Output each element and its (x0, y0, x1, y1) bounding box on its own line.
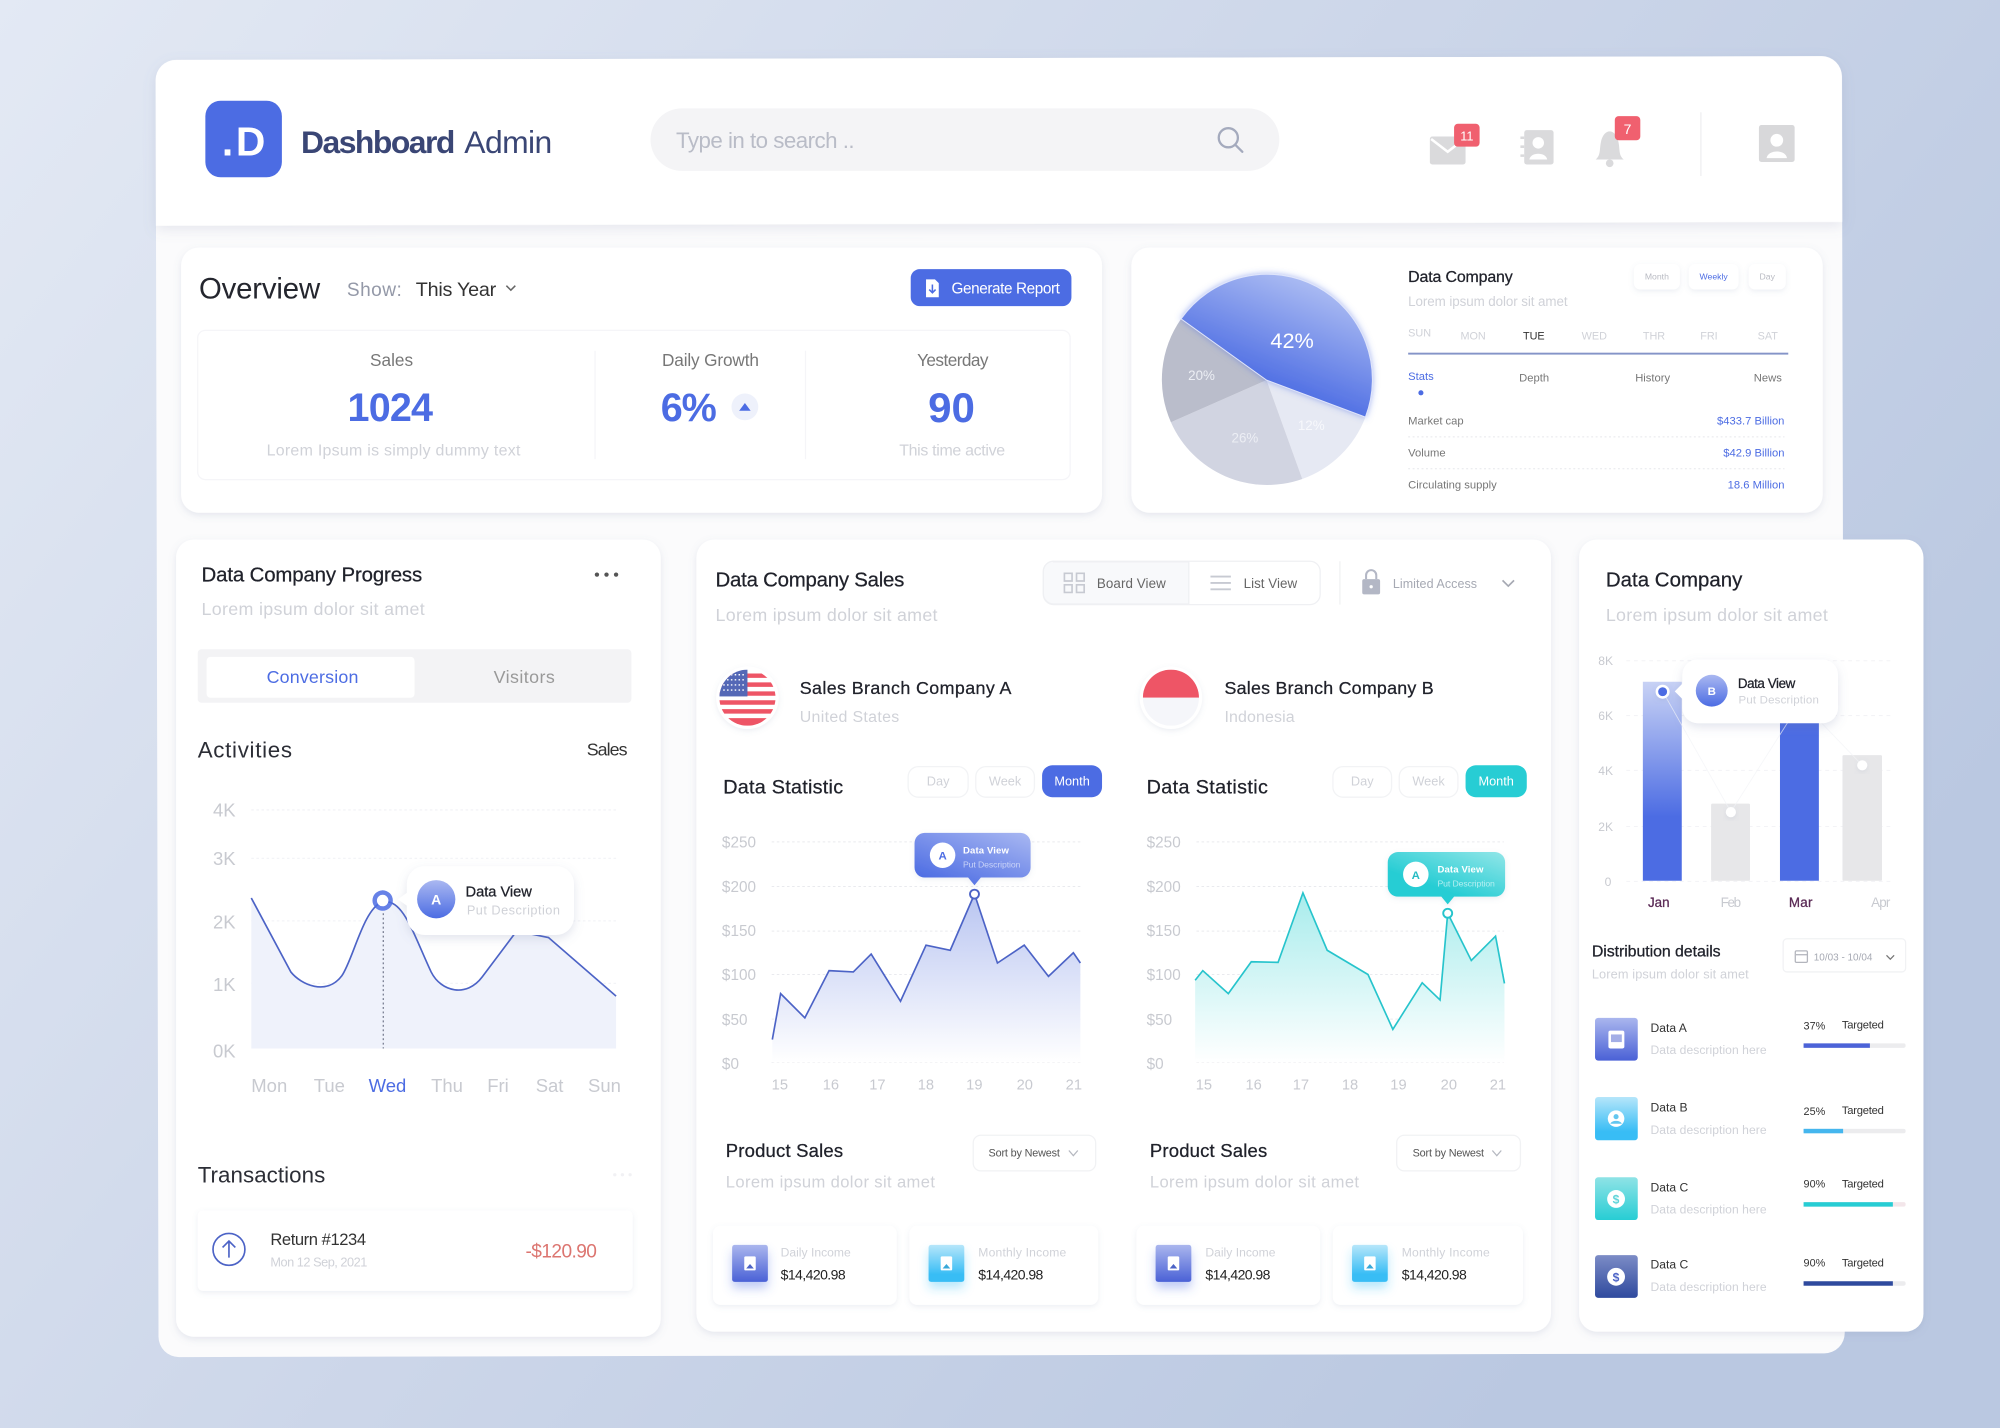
month labels: Mar (1789, 895, 1813, 910)
area chart A (722, 833, 1082, 1093)
tabs (198, 649, 631, 703)
view toggle (1043, 561, 1320, 605)
statistic B heading and buttons: Day (1351, 774, 1374, 789)
row: data C second: $ (1613, 1270, 1620, 1284)
tooltip A: Data View (963, 845, 1009, 856)
statistic A heading and buttons: Data Statistic (723, 776, 843, 798)
transaction row: Mon 12 Sep, 2021 (270, 1255, 367, 1270)
market rows: 18.6 Million (1728, 480, 1784, 492)
panel: data company bars and distribution (1579, 540, 1923, 1332)
distribution heading: Distribution details (1592, 944, 1721, 961)
tabs: Conversion (267, 667, 358, 687)
overview heading: Overview (199, 272, 321, 305)
row: data A: Targeted (1842, 1020, 1884, 1032)
market rows: Volume (1408, 448, 1446, 460)
weekday row: SAT (1758, 330, 1778, 342)
bar chart: 8K (1598, 654, 1613, 668)
range buttons (1634, 264, 1786, 290)
tooltip: Put Description (467, 903, 560, 918)
tooltip A: A (938, 851, 947, 863)
income card: monthly A: Monthly Income (978, 1245, 1067, 1259)
show filter: Show: (347, 280, 402, 301)
tooltip: Data View (466, 885, 532, 901)
icon: Indonesia flag (1143, 670, 1199, 726)
bar chart: 2K (1598, 820, 1613, 834)
product sales B heading: Lorem ipsum dolor sit amet (1150, 1173, 1359, 1192)
area chart A: $200 (722, 879, 756, 896)
line chart: activities (213, 799, 621, 1096)
stat: sales: Sales (370, 350, 413, 370)
month labels: Feb (1721, 895, 1741, 910)
generate report button (911, 269, 1071, 306)
main dashboard panel (156, 56, 1845, 1357)
row: data C: $ (1613, 1192, 1620, 1206)
icon: mail with badge: 11 (1460, 128, 1473, 143)
product sales A heading: Product Sales (726, 1140, 843, 1161)
distribution heading: Lorem ipsum dolor sit amet (1592, 966, 1749, 981)
row: data C: Targeted (1842, 1179, 1884, 1191)
range buttons: Month (1645, 271, 1669, 281)
panel: data company sales (696, 540, 1551, 1332)
market rows: $433.7 Billion (1717, 416, 1784, 428)
x axis B (1196, 1077, 1506, 1093)
weekday row: FRI (1700, 330, 1718, 342)
title: Dashboard Admin: Admin (464, 124, 552, 160)
row: data B: Targeted (1842, 1105, 1884, 1117)
stat tabs: Stats (1408, 371, 1434, 383)
progress heading (202, 565, 618, 619)
branch B: Indonesia (1224, 709, 1295, 726)
area chart B: $100 (1147, 967, 1181, 984)
product sales A heading: Sort by Newest (989, 1147, 1060, 1159)
line chart: activities: 0K (213, 1040, 236, 1061)
row: data B: Data description here (1651, 1123, 1767, 1137)
row: data A: Data description here (1651, 1043, 1767, 1057)
x axis labels: Sun (588, 1075, 621, 1096)
income card: daily A: $14,420.98 (781, 1266, 846, 1282)
panel: pie and company data (1131, 247, 1823, 513)
tooltip A: Put Description (963, 859, 1021, 869)
area chart A: $0 (722, 1056, 739, 1073)
weekday row: SUN (1408, 328, 1431, 340)
header bar (156, 56, 1842, 226)
income card: monthly B: $14,420.98 (1402, 1266, 1467, 1282)
icon: contacts (1520, 130, 1554, 165)
company heading (1408, 269, 1568, 309)
area chart A: $50 (722, 1012, 747, 1029)
title: Dashboard Admin (301, 124, 552, 160)
x axis A: 16 (823, 1077, 839, 1093)
statistic B heading and buttons: Week (1412, 774, 1445, 789)
logo (205, 101, 282, 177)
row: data C (1595, 1177, 1906, 1220)
stat tabs: History (1635, 372, 1670, 384)
weekday row: WED (1582, 330, 1607, 342)
row: data B (1595, 1097, 1906, 1140)
logo: .D (222, 119, 265, 165)
row: data C: Data C (1651, 1180, 1688, 1194)
range buttons: Weekly (1700, 271, 1728, 281)
date picker (1783, 939, 1906, 972)
bar chart: 0 (1605, 875, 1612, 889)
statistic A heading and buttons: Week (989, 774, 1022, 789)
stat: daily growth: 6% (661, 386, 717, 430)
stat: yesterday: Yesterday (917, 350, 989, 370)
progress heading: Data Company Progress (202, 565, 422, 587)
row: data B: 25% (1804, 1106, 1826, 1118)
tooltip: A (431, 891, 441, 907)
line chart: activities: 1K (213, 974, 236, 995)
stat: yesterday (899, 350, 1005, 459)
stat: yesterday: This time active (899, 442, 1005, 459)
x axis B: 21 (1490, 1077, 1506, 1093)
row: data C second (1595, 1255, 1906, 1298)
x axis A: 20 (1017, 1077, 1033, 1093)
income card: monthly B (1333, 1226, 1523, 1305)
x axis A: 18 (918, 1077, 934, 1093)
bar chart (1598, 654, 1891, 910)
transaction row: -$120.90 (526, 1242, 597, 1263)
title: Dashboard Admin: Dashboard (301, 124, 455, 160)
row: data C second: Data C (1651, 1257, 1688, 1271)
tooltip B: Data View (1438, 864, 1484, 875)
limited access (1339, 561, 1514, 605)
x axis labels: Mon (251, 1075, 287, 1096)
stat: daily growth: Daily Growth (662, 350, 759, 370)
row: data A (1595, 1018, 1906, 1061)
stat: sales: 1024 (348, 386, 433, 430)
statistic B heading and buttons: Month (1478, 774, 1514, 789)
month labels (1648, 895, 1891, 910)
tooltip: Put Description (1739, 694, 1819, 706)
stat: sales (267, 350, 521, 459)
icon: mail with badge (1430, 124, 1480, 165)
stats box (198, 330, 1070, 480)
activities heading (198, 738, 628, 763)
row: data C second: 90% (1804, 1258, 1826, 1270)
branch A: United States (800, 709, 899, 726)
activities heading: Sales (587, 740, 628, 760)
income card: daily A: Daily Income (781, 1245, 851, 1259)
area chart B: $0 (1147, 1056, 1164, 1073)
transactions heading: Transactions (198, 1162, 325, 1187)
tabs: Visitors (494, 667, 555, 687)
x axis labels: Tue (314, 1075, 345, 1096)
row: data C: 90% (1804, 1179, 1826, 1191)
pie chart: 42% (1270, 328, 1314, 353)
pie chart (1162, 274, 1372, 485)
statistic A heading and buttons: Day (927, 774, 950, 789)
right heading: Data Company (1606, 570, 1743, 592)
income card: daily B (1136, 1226, 1320, 1305)
transactions heading (198, 1162, 632, 1187)
panel: data company progress (176, 540, 661, 1337)
product sales B heading: Sort by Newest (1413, 1147, 1484, 1159)
area chart B (1147, 835, 1506, 1093)
bar chart: 4K (1598, 764, 1613, 778)
area chart B: $200 (1147, 879, 1181, 896)
icon: user (1759, 125, 1795, 162)
tooltip (398, 866, 574, 935)
header divider (1700, 112, 1702, 176)
branch A: Sales Branch Company A (800, 678, 1012, 698)
month labels: Jan (1648, 895, 1670, 910)
tooltip B: A (1412, 870, 1420, 882)
branch A (716, 666, 1012, 729)
search bar (651, 108, 1279, 171)
stat: daily growth (661, 350, 759, 430)
generate report button: Generate Report (952, 280, 1061, 297)
x axis A (772, 1077, 1082, 1093)
weekday row: MON (1460, 330, 1486, 342)
weekday row (1408, 328, 1788, 355)
stat tabs: Depth (1519, 372, 1549, 384)
line chart: activities: 4K (213, 799, 236, 820)
row: data C second: Data description here (1651, 1280, 1767, 1294)
area chart B: $50 (1147, 1012, 1172, 1029)
statistic B heading and buttons: Data Statistic (1147, 776, 1268, 798)
x axis labels: Fri (487, 1075, 509, 1096)
tooltip B: Put Description (1438, 878, 1495, 888)
line chart: activities: 3K (213, 848, 236, 869)
income card: monthly B: Monthly Income (1402, 1245, 1490, 1259)
product sales B heading (1150, 1135, 1520, 1192)
x axis B: 20 (1441, 1077, 1457, 1093)
row: data A: Data A (1651, 1021, 1688, 1035)
right heading (1606, 570, 1828, 625)
row: data A: 37% (1804, 1020, 1826, 1032)
income card: daily A (713, 1226, 897, 1305)
x axis B: 17 (1293, 1077, 1309, 1093)
pie chart: 26% (1232, 431, 1258, 446)
market rows: Circulating supply (1408, 480, 1497, 492)
stat tabs (1408, 371, 1782, 395)
sales heading (716, 570, 938, 625)
x axis A: 15 (772, 1077, 788, 1093)
market rows: Market cap (1408, 416, 1464, 428)
market rows (1408, 416, 1784, 492)
limited access: Limited Access (1393, 577, 1477, 591)
panel: overview (181, 247, 1102, 513)
x axis labels: Thu (431, 1075, 463, 1096)
pie chart: 20% (1188, 368, 1215, 383)
branch B (1140, 666, 1434, 729)
stat tabs: News (1754, 372, 1782, 384)
range buttons: Day (1760, 271, 1776, 281)
activities heading: Activities (198, 738, 292, 763)
income card: monthly A (909, 1226, 1098, 1305)
distribution heading (1592, 944, 1749, 981)
area chart B: $250 (1147, 835, 1181, 852)
weekday row: TUE (1523, 330, 1545, 342)
icon: US flag (719, 670, 776, 726)
x axis A: 21 (1066, 1077, 1082, 1093)
x axis B: 19 (1390, 1077, 1407, 1093)
right heading: Lorem ipsum dolor sit amet (1606, 605, 1828, 625)
weekday row: THR (1643, 330, 1665, 342)
transaction row (198, 1210, 633, 1291)
product sales A heading (726, 1135, 1096, 1192)
stat: yesterday: 90 (928, 384, 975, 431)
area chart A: $100 (722, 967, 756, 984)
row: data C: Data description here (1651, 1203, 1767, 1217)
line chart: activities: 2K (213, 912, 236, 933)
show filter (347, 279, 515, 301)
icon: bell with badge: 7 (1624, 121, 1632, 137)
progress heading: Lorem ipsum dolor sit amet (202, 599, 425, 619)
x axis labels (251, 1075, 621, 1096)
statistic A heading and buttons (723, 765, 1102, 798)
company heading: Data Company (1408, 269, 1513, 286)
show filter: This Year (416, 279, 497, 301)
bar chart: 6K (1598, 709, 1613, 723)
sales heading: Lorem ipsum dolor sit amet (716, 605, 938, 625)
month labels: Apr (1871, 895, 1891, 910)
x axis B: 18 (1342, 1077, 1358, 1093)
icon: bell with badge (1596, 116, 1640, 167)
branch B: Sales Branch Company B (1224, 678, 1434, 698)
stat: sales: Lorem Ipsum is simply dummy text (267, 442, 521, 459)
statistic A heading and buttons: Month (1054, 774, 1090, 789)
x axis labels: Sat (536, 1075, 563, 1096)
tooltip (1675, 659, 1838, 723)
pie chart: 12% (1298, 418, 1325, 433)
product sales A heading: Lorem ipsum dolor sit amet (726, 1173, 935, 1192)
row: data C second: Targeted (1842, 1258, 1884, 1270)
search bar: Type in to search .. (676, 128, 855, 153)
x axis B: 15 (1196, 1077, 1212, 1093)
x axis A: 19 (966, 1077, 983, 1093)
x axis B: 16 (1246, 1077, 1262, 1093)
row: data B: Data B (1651, 1101, 1688, 1115)
tooltip A (915, 833, 1031, 885)
date picker: 10/03 - 10/04 (1814, 952, 1873, 963)
x axis labels: Wed (369, 1075, 406, 1096)
tooltip: B (1708, 686, 1716, 698)
transaction row: Return #1234 (270, 1230, 366, 1249)
tooltip: Data View (1738, 676, 1796, 691)
income card: daily B: Daily Income (1205, 1245, 1276, 1259)
statistic B heading and buttons (1147, 765, 1527, 798)
area chart A: $250 (722, 835, 756, 852)
income card: daily B: $14,420.98 (1205, 1266, 1271, 1282)
company heading: Lorem ipsum dolor sit amet (1408, 294, 1568, 309)
area chart A: $150 (722, 923, 756, 940)
product sales B heading: Product Sales (1150, 1140, 1267, 1161)
view toggle: List View (1244, 576, 1298, 591)
tooltip B (1388, 852, 1505, 904)
area chart B: $150 (1147, 923, 1181, 940)
sales heading: Data Company Sales (716, 570, 904, 592)
income card: monthly A: $14,420.98 (978, 1266, 1044, 1282)
view toggle: Board View (1097, 576, 1166, 591)
market rows: $42.9 Billion (1723, 448, 1784, 460)
x axis A: 17 (869, 1077, 886, 1093)
